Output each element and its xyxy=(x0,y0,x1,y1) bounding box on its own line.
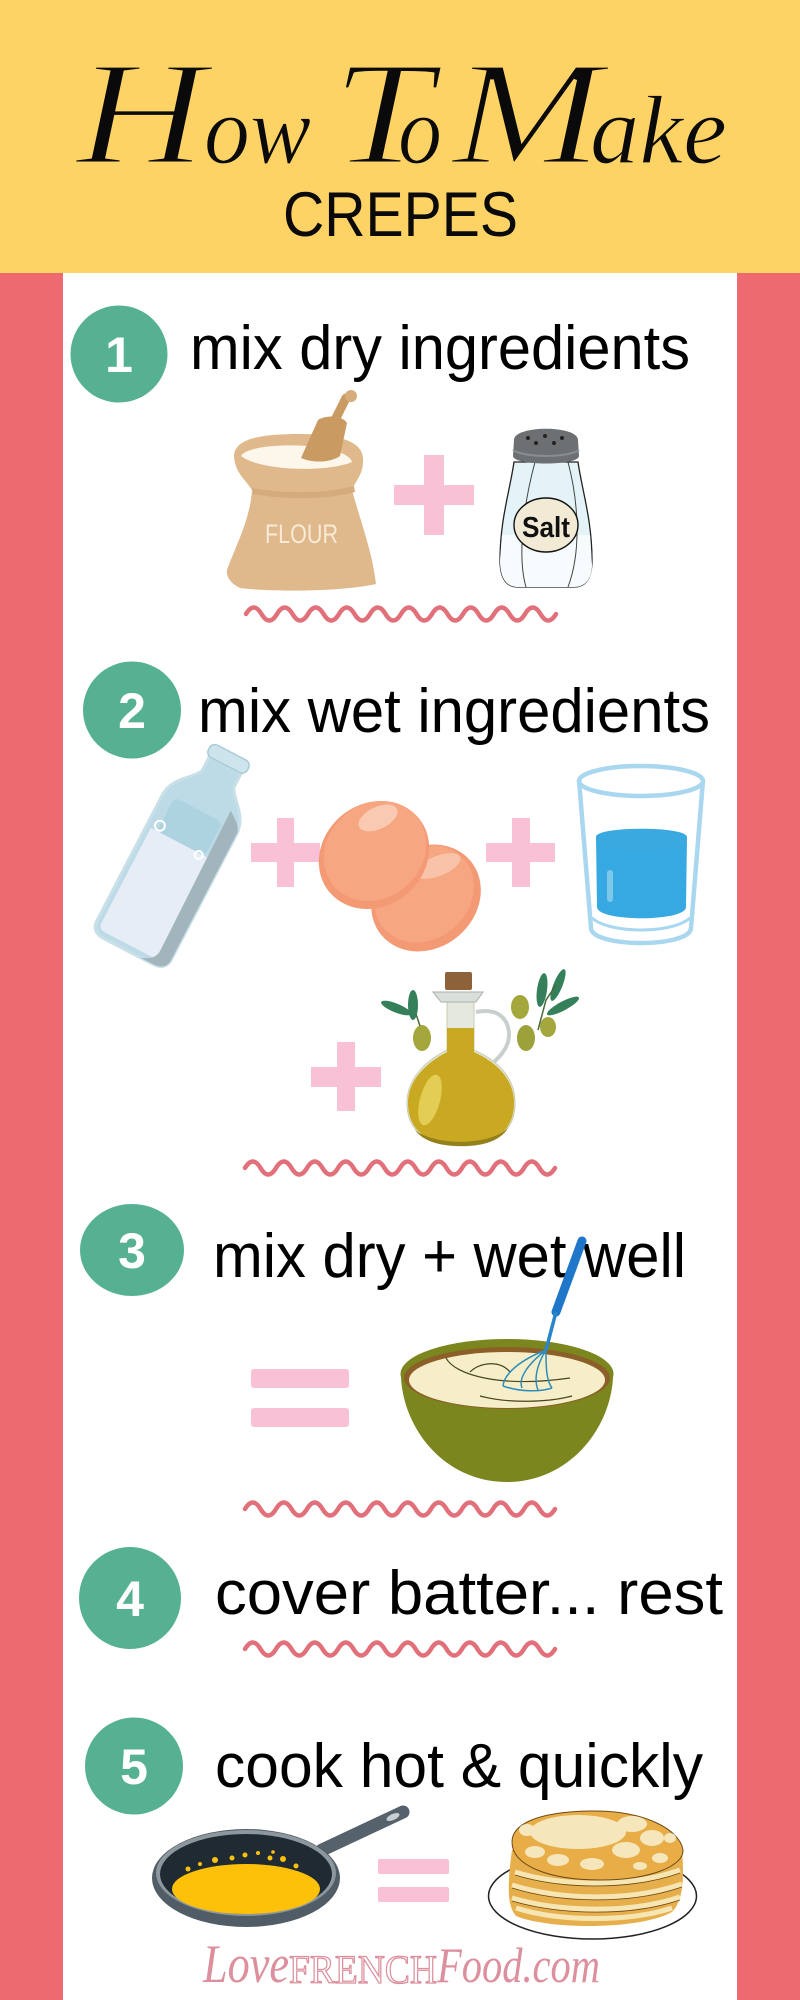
equals sign xyxy=(378,1859,449,1902)
plus sign xyxy=(394,455,474,535)
step 1 number badge xyxy=(70,306,168,402)
footer: LoveFRENCHFood.com wordmark xyxy=(202,1934,600,1994)
icon: two eggs xyxy=(297,779,503,974)
step 3 heading: mix dry + wet well xyxy=(213,1222,686,1291)
title: How To Make: ow xyxy=(204,77,311,185)
icon: frying pan with butter xyxy=(152,1811,403,1927)
step 5 heading: cook hot & quickly xyxy=(215,1732,703,1801)
squiggle divider 2 xyxy=(245,1162,555,1174)
squiggle divider 4 xyxy=(245,1642,555,1656)
icon: olive oil jar xyxy=(379,968,581,1146)
footer: LoveFRENCHFood.com wordmark: Food.com xyxy=(436,1937,600,1993)
title: How To Make: o xyxy=(398,77,442,185)
subtitle: CREPES: CREPES xyxy=(283,180,518,250)
plus sign xyxy=(486,818,555,887)
step 5 number badge: 5 xyxy=(120,1739,148,1795)
equals sign xyxy=(251,1369,349,1427)
step 3 number badge: 3 xyxy=(118,1223,146,1279)
panel: white content column xyxy=(63,272,737,2000)
icon: flour sack: FLOUR xyxy=(265,519,338,549)
footer: LoveFRENCHFood.com wordmark: Love xyxy=(202,1934,289,1994)
squiggle divider 3 xyxy=(245,1502,555,1516)
step 1 heading: mix dry ingredients xyxy=(190,314,690,383)
footer: LoveFRENCHFood.com wordmark: FRENCH xyxy=(289,1947,437,1992)
icon: flour sack xyxy=(227,390,376,591)
step 4 heading: cover batter... rest xyxy=(215,1559,723,1628)
squiggle divider 1 xyxy=(246,608,556,620)
step 2 number badge xyxy=(83,662,181,758)
icon: bowl with whisk xyxy=(400,1241,614,1482)
step 2 heading: mix wet ingredients xyxy=(198,677,710,746)
icon: milk bottle xyxy=(91,733,269,971)
step 4 number badge xyxy=(79,1547,181,1649)
title: How To Make xyxy=(74,32,727,196)
icon: glass of water xyxy=(579,766,703,943)
title: How To Make: H xyxy=(74,32,215,196)
panel: yellow header xyxy=(0,0,800,273)
icon: stack of crepes on plate xyxy=(488,1811,696,1939)
title: How To Make: M xyxy=(450,32,611,196)
step 5 number badge xyxy=(85,1718,183,1814)
step 3 number badge xyxy=(80,1204,184,1296)
title: How To Make: ake xyxy=(590,77,727,185)
step 4 number badge: 4 xyxy=(116,1571,144,1627)
icon: salt shaker: Salt xyxy=(522,512,570,544)
title: How To Make: T xyxy=(332,32,444,196)
icon: salt shaker xyxy=(500,429,592,587)
step 2 number badge: 2 xyxy=(118,683,146,739)
plus sign xyxy=(311,1042,381,1111)
plus sign xyxy=(251,818,320,887)
step 1 number badge: 1 xyxy=(105,327,133,383)
